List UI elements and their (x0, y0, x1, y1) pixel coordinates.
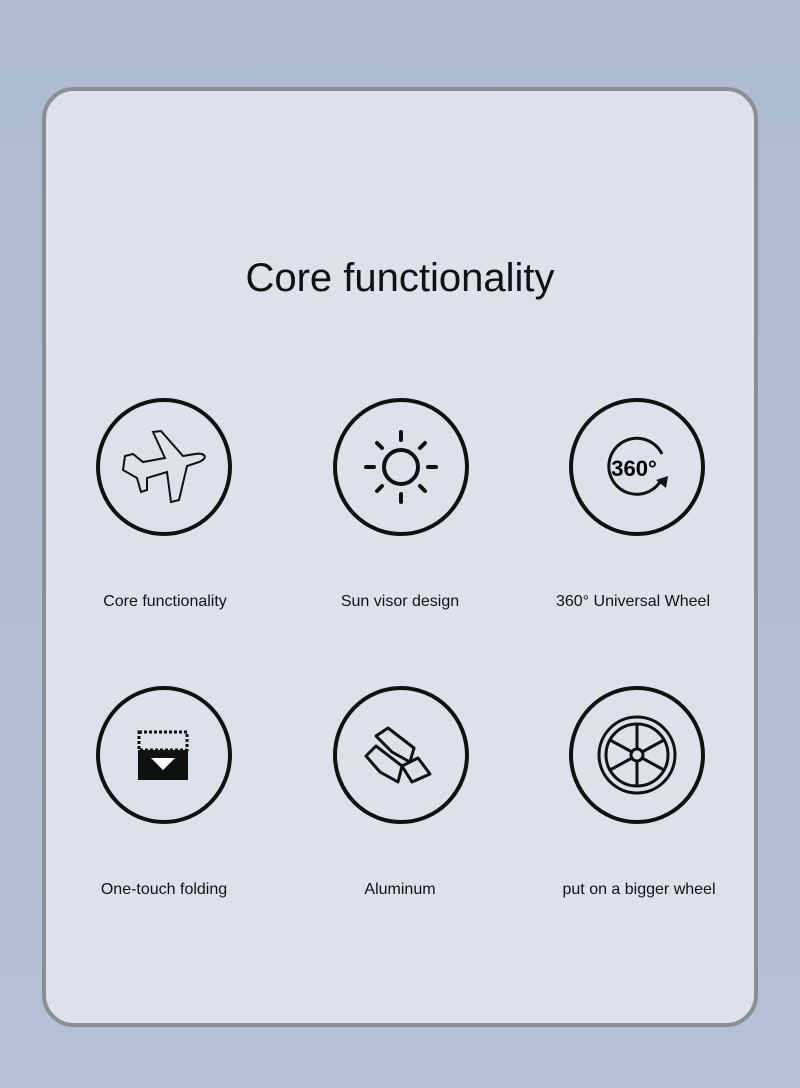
card panel (42, 87, 758, 1027)
label: folding: One-touch folding (101, 881, 227, 898)
icon: wheel (569, 686, 705, 824)
icon: folding (96, 686, 232, 824)
icon: 360 (569, 398, 705, 536)
label: 360 wheel: 360° Universal Wheel (556, 593, 710, 610)
label: aluminum: Aluminum (364, 881, 436, 898)
title: Core functionality (245, 256, 555, 300)
icon: 360: 360° (611, 456, 657, 481)
label: sun visor: Sun visor design (341, 593, 459, 610)
icon: sun (333, 398, 469, 536)
icon: airplane (96, 398, 232, 536)
label: bigger wheel: put on a bigger wheel (562, 881, 716, 898)
label: core functionality: Core functionality (103, 593, 227, 610)
icon: aluminum bars (333, 686, 469, 824)
